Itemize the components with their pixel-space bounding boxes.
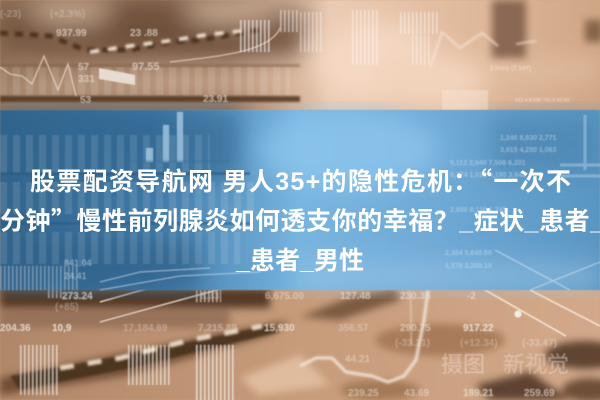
price numbers: 53: [80, 95, 92, 106]
white bar clusters: [238, 20, 270, 52]
stock table numbers: 24.41: [64, 271, 87, 281]
stock table numbers: 2,850 9,120 1,745: [450, 207, 507, 214]
price numbers: 917.22: [463, 323, 494, 334]
price numbers: 127.48: [340, 291, 371, 302]
white bar clusters: [18, 345, 60, 395]
price numbers: [0, 291, 557, 399]
light blue column bars: [146, 148, 153, 162]
stock table numbers: 2,304 5,640.50: [445, 250, 492, 257]
price numbers: 10,9: [52, 323, 72, 334]
stock table numbers: 1,246 8,630 2,771: [500, 135, 557, 142]
price numbers: 97.55: [132, 61, 160, 73]
white price line chart: [0, 56, 76, 96]
title line 2: 分钟”慢性前列腺炎如何透支你的幸福？_症状_患者_: [0, 202, 600, 238]
stock table numbers: 8,374 1,026 4,195 3,642: [450, 172, 526, 179]
price numbers: 259.69: [524, 388, 555, 399]
price numbers: 290.75: [400, 323, 431, 334]
price numbers: (-33.47): [522, 338, 557, 349]
price numbers: 331: [78, 74, 95, 85]
price numbers: 57: [78, 62, 90, 73]
price numbers: 6,675.00: [265, 291, 304, 302]
price numbers: 17,184.69: [123, 323, 168, 334]
price numbers: 356.57: [338, 323, 369, 334]
white label bar: [99, 68, 135, 85]
price numbers: (+2.3%): [50, 9, 85, 20]
price numbers: 239.25: [348, 388, 379, 399]
price numbers: 44.21: [345, 354, 370, 365]
price numbers: 212.4 8,630 721.5 62.93: [515, 98, 569, 104]
stock table numbers: 5,112 2,940 7,508 6,201: [450, 160, 526, 167]
title line 3: _患者_男性: [235, 247, 364, 275]
price numbers: 273.24: [62, 291, 93, 302]
stock table numbers: 1,578 3,209.10: [445, 263, 492, 270]
panel: blue title band: [0, 110, 600, 290]
price numbers: 15,930: [264, 323, 295, 334]
price numbers: 23.91: [203, 94, 228, 105]
price numbers: [0, 9, 569, 106]
price numbers: 937.99: [56, 28, 87, 39]
white line chart: [300, 290, 428, 382]
price numbers: 230.35: [400, 291, 431, 302]
price numbers: 43.69: [404, 388, 429, 399]
stock table numbers: 841.04: [64, 258, 92, 268]
price numbers: -2: [467, 291, 476, 302]
price numbers: (-33.21): [395, 338, 430, 349]
panel: bottom financial photo background: 新视觉: [503, 352, 569, 377]
price numbers: 23 .88: [130, 28, 158, 39]
price numbers: 189.21: [463, 388, 494, 399]
price numbers: 3.Sony (7.14Y): [490, 66, 531, 72]
price numbers: 204.36: [0, 323, 31, 334]
title: 股票配资导航网 男人35+的隐性危机: [0, 162, 600, 275]
price numbers: (+12.34): [460, 338, 498, 349]
panel: bottom financial photo background: [0, 285, 600, 400]
stock table numbers: [64, 135, 557, 281]
stock table numbers: 3,915 4,280 1,063: [500, 147, 557, 154]
price numbers: (-23): [0, 9, 21, 20]
watermark: 摄图: [441, 352, 485, 377]
price numbers: 8.33: [200, 291, 220, 302]
bead chain: [0, 30, 260, 50]
title line 1: 股票配资导航网 男人35+的隐性危机：“一次不: [30, 162, 571, 198]
panel: top financial photo background: [0, 0, 600, 110]
price numbers: (+85): [55, 302, 79, 313]
price numbers: 7,215.89: [198, 323, 237, 334]
